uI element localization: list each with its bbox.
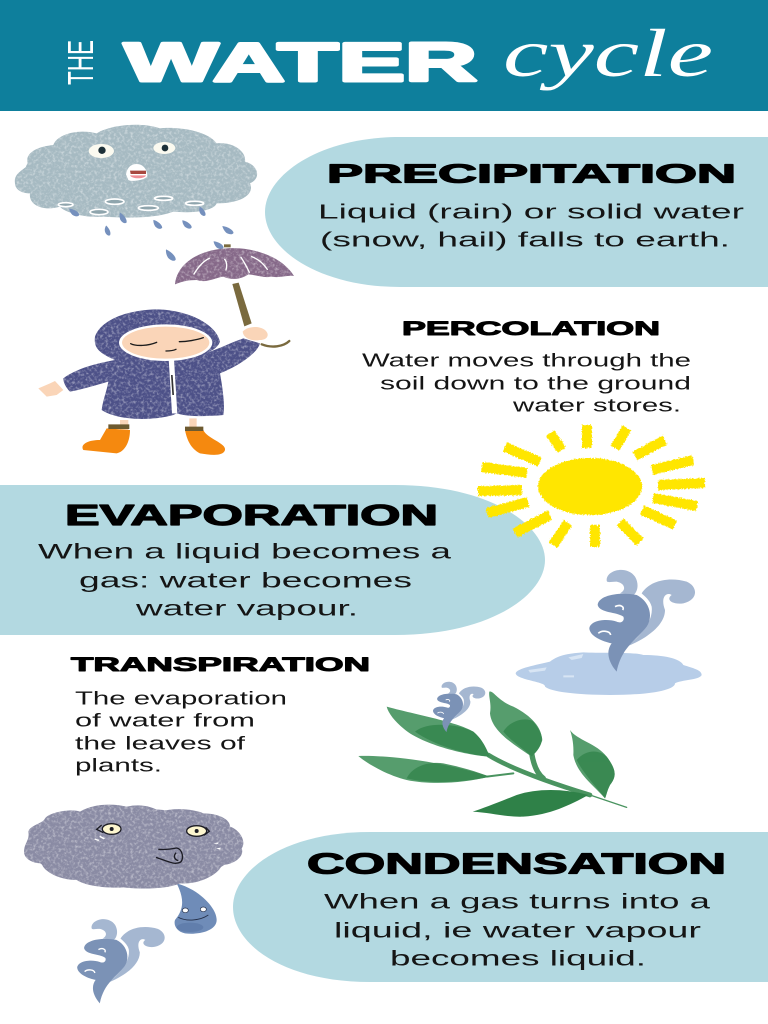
illustration: puddle with vapour	[516, 570, 702, 695]
text: transpiration definition: plants.	[75, 756, 162, 776]
text: precipitation definition: Liquid (rain) or solid water	[318, 202, 745, 224]
title: THE: THE	[60, 40, 101, 85]
title: WATER: WATER	[124, 31, 477, 93]
illustration: vapour rising from leaf	[433, 682, 485, 732]
header band	[0, 0, 768, 111]
text: precipitation definition	[318, 202, 745, 252]
boots	[82, 424, 225, 455]
text: transpiration definition: The evaporation	[75, 688, 287, 708]
title: cycle: cycle	[503, 15, 713, 91]
illustration: child in raincoat with umbrella	[38, 244, 294, 455]
illustration: vapour under cloud	[77, 919, 165, 1003]
illustration: condensation cloud with face	[24, 805, 243, 889]
illustration: smiling water drop	[175, 883, 217, 934]
text: percolation definition: water stores.	[511, 396, 681, 416]
text: transpiration definition	[75, 688, 287, 776]
text: condensation definition: When a gas turns into a	[324, 890, 710, 914]
illustration: sun	[478, 425, 705, 547]
illustration: rain cloud with face	[15, 125, 257, 262]
panel: evaporation	[0, 485, 545, 635]
text: percolation definition: soil down to the ground	[380, 374, 691, 394]
illustration: leafy branch	[358, 691, 627, 817]
text: percolation definition	[362, 350, 691, 416]
text: condensation definition: becomes liquid.	[390, 946, 646, 970]
heading: precipitation: PRECIPITATION	[327, 158, 736, 188]
text: evaporation definition	[38, 540, 451, 620]
text: transpiration definition: of water from	[75, 710, 255, 730]
text: evaporation definition: gas: water becomes	[79, 568, 412, 592]
text: condensation definition	[324, 890, 710, 970]
panel: precipitation	[265, 137, 768, 287]
text: condensation definition: liquid, ie water vapour	[334, 918, 701, 942]
heading: percolation: PERCOLATION	[402, 318, 660, 340]
hands	[38, 327, 268, 397]
text: evaporation definition: When a liquid becomes a	[38, 540, 451, 564]
text: transpiration definition: the leaves of	[75, 734, 247, 754]
heading: evaporation: EVAPORATION	[65, 500, 438, 532]
text block: percolation	[362, 318, 691, 416]
panel: condensation	[233, 832, 768, 982]
text: evaporation definition: water vapour.	[134, 596, 358, 620]
raincoat hood and body	[63, 309, 260, 430]
umbrella	[175, 244, 294, 347]
face	[119, 324, 212, 361]
heading: condensation: CONDENSATION	[307, 848, 726, 880]
text block: transpiration	[71, 655, 370, 776]
text: precipitation definition: (snow, hail) falls to earth.	[320, 230, 730, 252]
heading: transpiration: TRANSPIRATION	[71, 655, 370, 676]
text: percolation definition: Water moves through the	[362, 350, 691, 370]
